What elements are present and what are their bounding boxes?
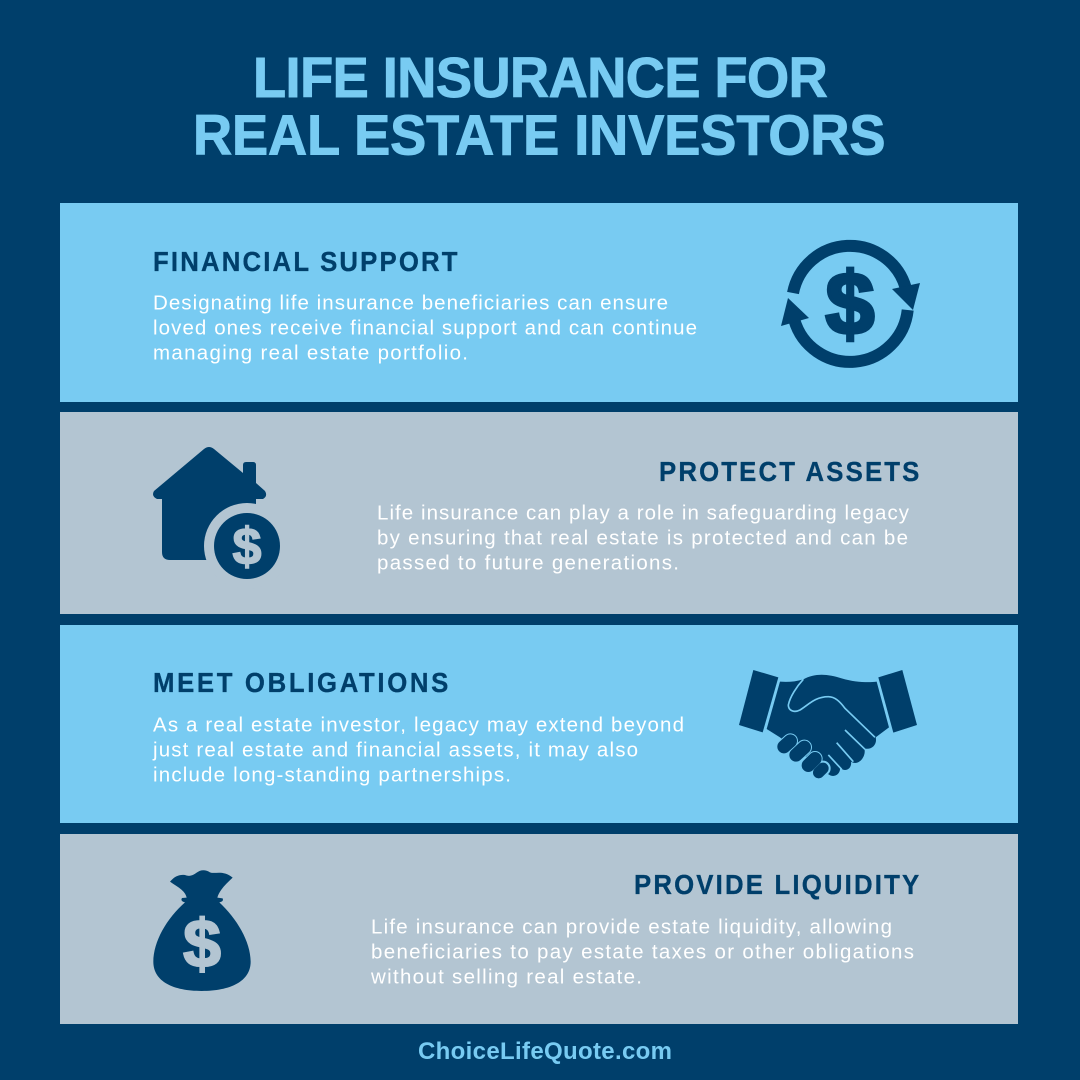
panel: financial support: [60, 203, 1018, 402]
icon: handshake: [739, 670, 917, 776]
heading: meet obligations: MEET OBLIGATIONS: [153, 667, 448, 698]
text block: financial support: [153, 292, 697, 364]
title: LIFE INSURANCE FOR: [253, 46, 828, 109]
heading: provide liquidity: PROVIDE LIQUIDITY: [634, 869, 919, 900]
heading: financial support: FINANCIAL SUPPORT: [153, 246, 458, 277]
text block: financial support: managing real estate portfolio.: [153, 342, 468, 364]
text block: financial support: Designating life insurance beneficiaries can ensure: [153, 292, 668, 314]
panel: meet obligations: [60, 625, 1018, 823]
icon: circular arrows with dollar: $: [826, 254, 874, 353]
text block: meet obligations: As a real estate investor, legacy may extend beyond: [153, 714, 684, 736]
text block: protect assets: [377, 502, 910, 574]
text block: meet obligations: just real estate and financial assets, it may also: [152, 738, 638, 762]
title: [193, 46, 886, 167]
text block: provide liquidity: Life insurance can provide estate liquidity, allowing: [371, 916, 892, 938]
text block: provide liquidity: [370, 916, 914, 988]
text block: provide liquidity: beneficiaries to pay estate taxes or other obligations: [371, 940, 914, 964]
title: REAL ESTATE INVESTORS: [193, 103, 886, 167]
text block: meet obligations: [152, 714, 684, 786]
text block: provide liquidity: without selling real estate.: [370, 966, 642, 988]
panel: provide liquidity: [60, 834, 1018, 1024]
icon: money bag: [153, 870, 251, 991]
icon: circular arrows with dollar: [781, 246, 920, 362]
icon: house with dollar coin: $: [233, 518, 262, 576]
text block: protect assets: passed to future generations.: [377, 552, 679, 574]
text block: protect assets: Life insurance can play a role in safeguarding legacy: [377, 502, 910, 524]
text block: financial support: loved ones receive financial support and can continue: [153, 316, 697, 340]
icon: money bag: $: [183, 906, 221, 982]
icon: house with dollar coin: [153, 447, 290, 589]
heading: protect assets: PROTECT ASSETS: [659, 456, 919, 487]
text block: meet obligations: include long-standing partnerships.: [153, 764, 511, 786]
footer: website: ChoiceLifeQuote.com: [418, 1038, 672, 1065]
text block: protect assets: by ensuring that real estate is protected and can be: [377, 526, 908, 550]
panel: protect assets: [60, 412, 1018, 614]
